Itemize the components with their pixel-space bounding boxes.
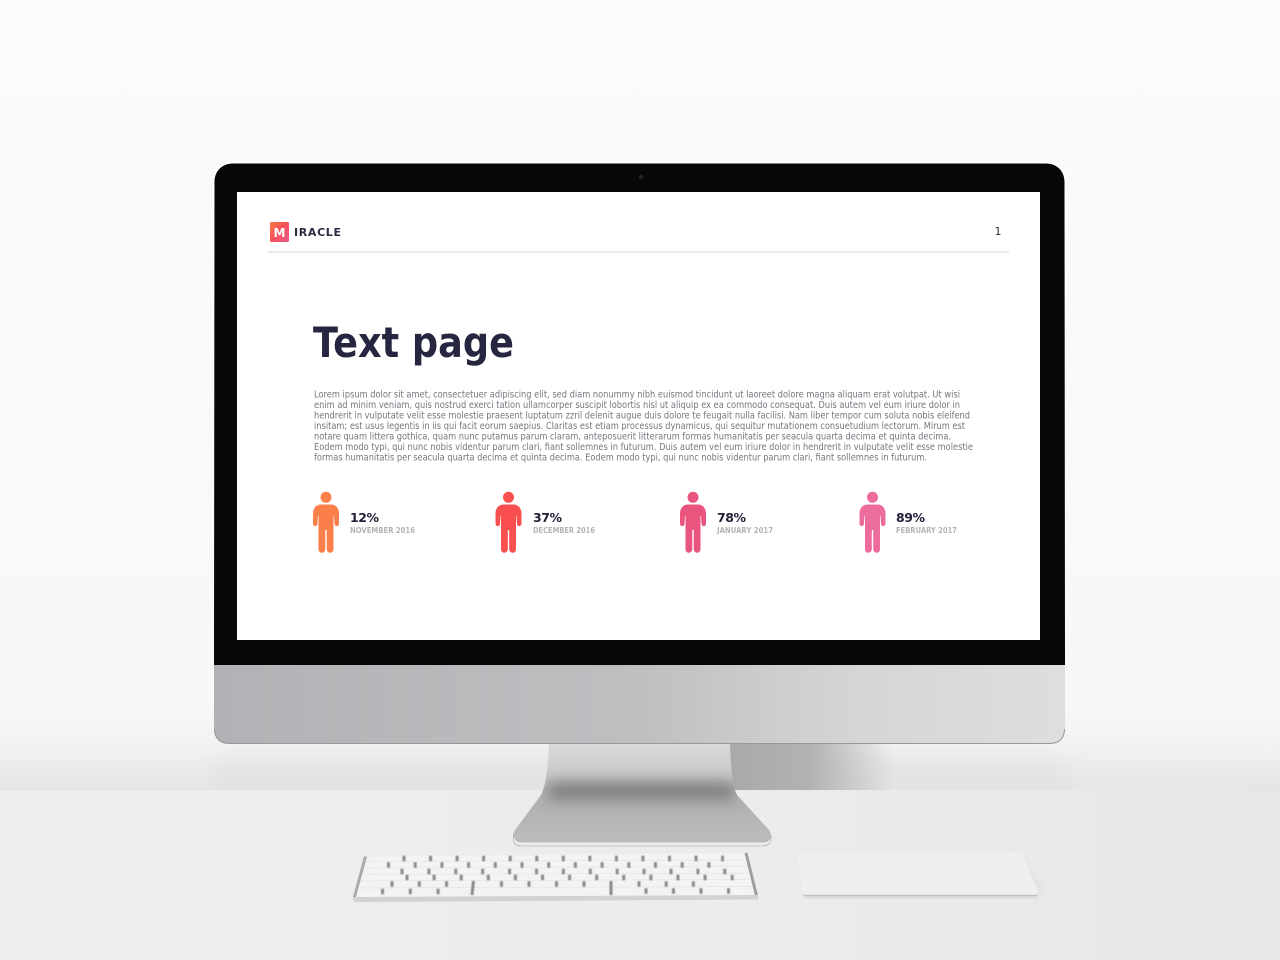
trackpad surface [797,852,1038,895]
stand shadow band [548,782,734,800]
page number: 1 [994,225,1002,238]
logo wordmark: IRACLE [294,226,341,239]
monitor chin [214,665,1065,744]
body paragraph: formas humanitatis per seacula quarta decima et quinta decima. Eodem modo typi, qui nunc nobis videntur parum clari, fiant sollemnes in futurum. [314,452,927,464]
keyboard left edge [353,856,367,897]
value: 78% [717,510,746,525]
body paragraph: enim ad minim veniam, quis nostrud exerci tation ullamcorper suscipit lobortis nisl ut aliquip ex ea commodo consequat. Duis autem vel eum iriure dolor in [314,400,960,411]
trackpad edge [803,893,1038,898]
body paragraph [314,390,973,464]
logo [270,222,341,242]
webcam [639,175,643,179]
logo mark [270,222,289,242]
keyboard key gaps [381,858,735,895]
trackpad [797,852,1044,898]
icon: person pink [860,492,886,553]
title: Text page [313,318,514,367]
stand shadow on wall [728,742,893,802]
icon: person red [496,492,522,553]
body paragraph: hendrerit in vulputate velit esse molestie praesent luptatum zzril delenit augue duis dolore te feugait nulla facilisi. Nam liber tempor cum soluta nobis eleifend [314,410,970,422]
slide content [268,222,1009,553]
value: 37% [533,510,562,525]
value: 12% [350,510,379,525]
keyboard bottom edge [353,895,758,902]
stat: 37% December 2016 [496,492,595,553]
icon: person rose [680,492,706,553]
body paragraph: insitam; est usus legentis in iis qui facit eorum saepius. Claritas est etiam processus dynamicus, qui sequitur mutationem consuetudium lectorum. Mirum est [314,421,965,432]
keyboard [353,853,758,902]
body paragraph: Lorem ipsum dolor sit amet, consectetuer adipiscing elit, sed diam nonummy nibh euismod tincidunt ut laoreet dolore magna aliquam erat volutpat. Ut wisi [314,390,960,400]
keyboard top surface [354,853,756,898]
label: JANUARY 2017 [716,526,773,535]
stat: 12% November 2016 [313,492,415,553]
screen [237,192,1040,640]
monitor bezel [214,164,1065,665]
body paragraph: notare quam littera gothica, quam nunc putamus parum claram, anteposuerit litterarum formas humanitatis per seacula quarta decima et quinta decima. [314,432,951,442]
chin bottom edge [214,729,1064,744]
monitor soft shadow on wall [214,755,1065,790]
monitor stand [513,744,771,846]
logo letter: M [274,226,285,240]
monitor halo [212,162,1066,300]
trackpad shadow [1020,858,1044,892]
stat: 78% January 2017 [680,492,773,553]
value: 89% [896,510,925,525]
icon: person orange [313,492,339,553]
keyboard row lines [357,860,755,888]
stand neck and base [513,744,771,843]
background: desk [0,790,1280,960]
keyboard right edge [744,853,758,896]
body paragraph: Eodem modo typi, qui nunc nobis videntur parum clari, fiant sollemnes in futurum. Duis autem vel eum iriure dolor in hendrerit in vulputate velit esse molestie [314,442,973,453]
stand base lip [513,836,771,846]
monitor [212,162,1066,744]
label: NOVEMBER 2016 [350,526,415,535]
label: FEBRUARY 2017 [896,526,957,535]
trackpad seam [804,894,1037,896]
label: DECEMBER 2016 [533,526,595,535]
stat: 89% February 2017 [860,492,957,553]
